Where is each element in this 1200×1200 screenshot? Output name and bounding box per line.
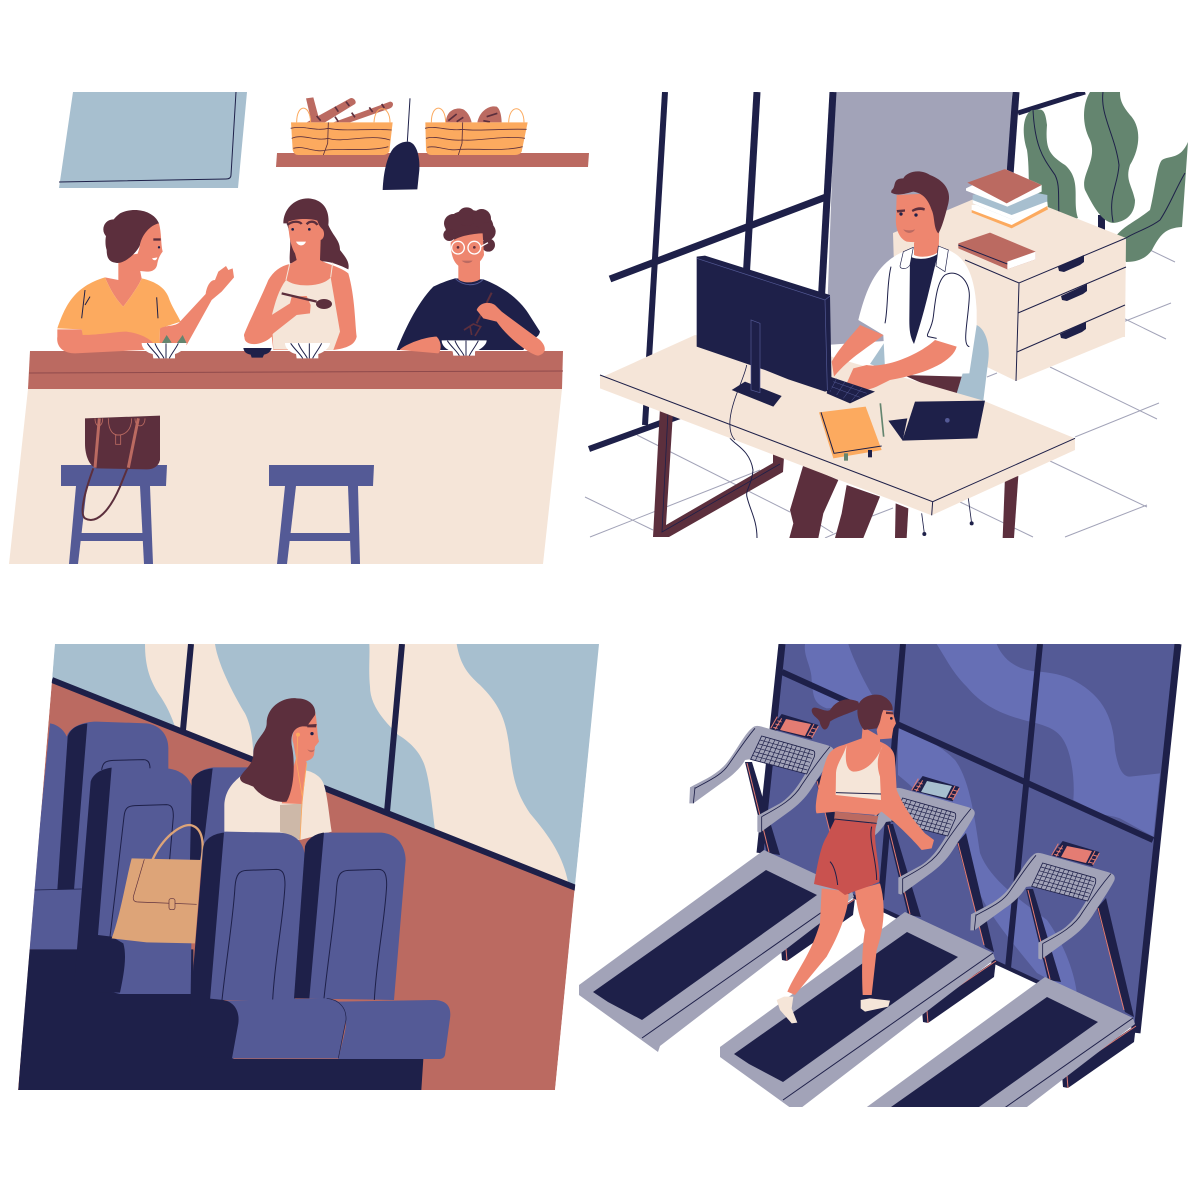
- soy sauce dish: [243, 348, 272, 358]
- window frame: [589, 92, 1085, 449]
- drawer cabinet: [893, 188, 1126, 381]
- treadmill 1: [579, 714, 855, 1052]
- bread basket left: [291, 97, 393, 155]
- counter top: [28, 351, 563, 389]
- keyboard: [827, 377, 875, 403]
- front seat right: [294, 833, 406, 1000]
- woman with earphones: [224, 698, 332, 840]
- monitor cable: [730, 365, 747, 440]
- stool right: [269, 465, 374, 564]
- man trousers legs: [789, 375, 962, 538]
- computer monitor: [697, 256, 832, 407]
- desk: [600, 335, 1075, 515]
- runner woman: [777, 695, 934, 1023]
- window light waves: [805, 644, 1160, 995]
- bread basket right: [425, 106, 528, 155]
- stacked books: [966, 169, 1048, 228]
- terracotta wall: [18, 680, 575, 1090]
- treadmill 3: [860, 841, 1136, 1179]
- counter front: [9, 389, 562, 564]
- pendant lamp: [383, 98, 419, 190]
- chair casters: [922, 498, 972, 533]
- gym window: [760, 644, 1180, 1030]
- panel: office desk scene: [585, 92, 1188, 538]
- man: [832, 171, 977, 390]
- person: woman in orange top: [57, 210, 234, 353]
- window mullions: [760, 644, 1178, 1033]
- far seat row: [28, 722, 168, 950]
- window frame: [52, 644, 576, 888]
- treadmill 2: [720, 776, 996, 1114]
- person: woman with spoon: [244, 198, 357, 350]
- pen: [880, 403, 884, 437]
- floor tile lines: [585, 250, 1175, 538]
- panel: train seat scene: [18, 640, 600, 1090]
- person: man with glasses: [397, 207, 545, 356]
- single book: [958, 233, 1036, 269]
- stool left: [61, 465, 167, 564]
- floor: [18, 949, 423, 1090]
- bowl left: [142, 343, 187, 358]
- seat cushions: [187, 997, 450, 1059]
- plant: [1024, 92, 1188, 262]
- seat behind woman: [190, 767, 250, 860]
- wall post right: [1010, 92, 1016, 175]
- wall shelf: [276, 153, 589, 167]
- blue wall window: [59, 92, 247, 188]
- bowl middle: [285, 343, 330, 358]
- monitor cable lower: [730, 438, 757, 538]
- desk legs: [895, 476, 1018, 538]
- sky window: [52, 640, 600, 885]
- panel: cafe counter scene: [9, 92, 589, 564]
- clouds outside window: [145, 644, 568, 883]
- laptop: [888, 401, 985, 441]
- panel: gym treadmill scene: [579, 644, 1182, 1107]
- desk frame left: [653, 408, 784, 537]
- middle seat: [74, 768, 193, 994]
- bowl right: [442, 340, 487, 356]
- window post: [821, 92, 833, 305]
- hanging bag on stool: [83, 416, 160, 520]
- notebook: [819, 407, 882, 461]
- handbag: [112, 825, 203, 943]
- office chair: [870, 325, 989, 401]
- grey wall panel: [826, 92, 1012, 345]
- front seat left: [191, 832, 305, 1000]
